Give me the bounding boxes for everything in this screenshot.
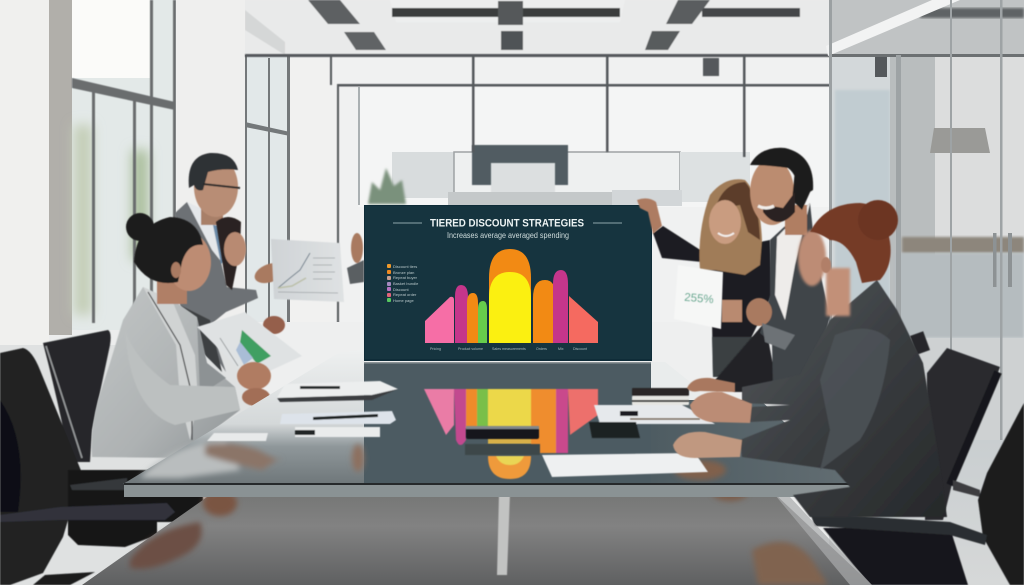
person: front woman in dark jacket xyxy=(673,200,947,517)
person: standing man with glasses xyxy=(175,153,288,372)
person: woman behind xyxy=(216,217,285,334)
person: woman left in grey suit xyxy=(92,213,240,458)
left pen note xyxy=(295,427,380,437)
screen legend: Home page xyxy=(393,298,414,303)
phone xyxy=(589,422,640,438)
chairs: right xyxy=(810,331,1024,585)
screen legend: Bronze plan xyxy=(393,270,414,275)
slab reflections xyxy=(130,483,828,585)
center device xyxy=(466,426,539,439)
woman hands with paper xyxy=(237,362,271,406)
ceiling xyxy=(175,0,1024,56)
screen subtitle: Increases average averaged spending xyxy=(447,231,569,240)
reflections of people on table xyxy=(140,440,726,480)
left paper stack xyxy=(277,381,398,398)
screen legend: Repeat order xyxy=(393,292,417,297)
left wall and window xyxy=(0,0,49,345)
screen reflection on table xyxy=(424,389,598,479)
chart labels xyxy=(430,347,587,351)
floor left xyxy=(0,345,250,585)
table surface xyxy=(123,350,365,484)
front woman hands xyxy=(673,432,742,458)
screen legend xyxy=(387,264,419,303)
middle window xyxy=(245,55,290,325)
paper: pie chart sheet xyxy=(197,312,302,380)
mountain bar chart xyxy=(425,249,598,343)
left document with pen xyxy=(280,411,396,424)
front paper xyxy=(542,453,708,477)
chart labels: Discount xyxy=(573,347,587,351)
presentation screen xyxy=(364,205,652,361)
chart labels: Product volume xyxy=(458,347,483,351)
person: woman with long hair xyxy=(653,179,772,377)
paper: percent sign: 255% xyxy=(684,292,714,306)
chart labels: Sales measurements xyxy=(492,347,526,351)
chart labels: Pricing xyxy=(430,347,441,351)
person: bearded man xyxy=(715,148,830,392)
table edge xyxy=(124,483,852,486)
paper: line chart sheet xyxy=(271,239,344,302)
person hand left of screen xyxy=(347,233,364,284)
glass meeting room xyxy=(330,58,895,338)
center strip xyxy=(497,493,510,575)
pale sheet xyxy=(207,433,268,441)
table xyxy=(82,350,872,585)
paper: percent sign xyxy=(674,265,723,329)
chart labels: Mix xyxy=(558,347,564,351)
table items xyxy=(207,381,715,477)
screen title: TIERED DISCOUNT STRATEGIES xyxy=(430,218,584,230)
right glass wall xyxy=(829,0,1024,460)
chart labels: Orders xyxy=(536,347,547,351)
screen legend: Basket bundle xyxy=(393,281,419,286)
right papers xyxy=(594,405,715,424)
screen legend: Repeat buyer xyxy=(393,275,418,280)
table front slab xyxy=(82,495,872,585)
floor behind table xyxy=(240,322,860,400)
chairs: left xyxy=(0,330,203,585)
right notebooks xyxy=(632,388,689,396)
screen legend: Discount tiers xyxy=(393,264,417,269)
screen legend: Discount xyxy=(393,287,409,292)
hand right top of screen xyxy=(637,198,662,234)
